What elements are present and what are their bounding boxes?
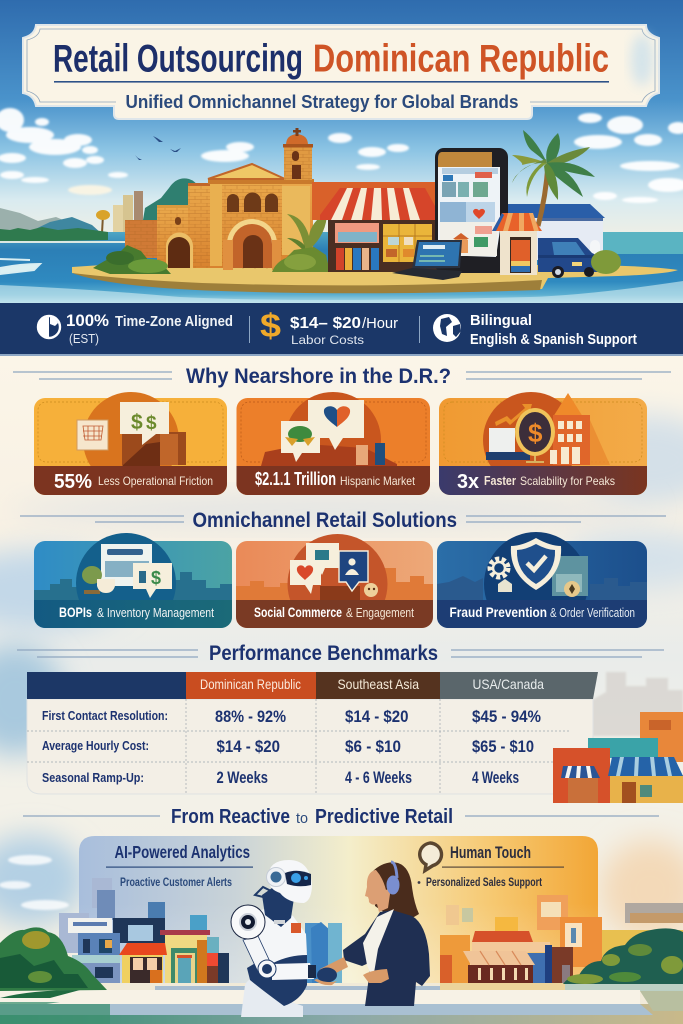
main heading: Dominican Republic xyxy=(313,38,609,80)
table header xyxy=(27,672,598,699)
side door xyxy=(166,233,193,268)
stat: bilingual: Bilingual xyxy=(470,312,532,329)
benchmarks table xyxy=(27,672,598,794)
stat: time zone xyxy=(38,312,233,346)
panel: social commerce: Social Commerce xyxy=(254,604,342,620)
tree left xyxy=(0,927,107,998)
stat: bilingual xyxy=(433,312,637,348)
small palm xyxy=(102,215,103,233)
shops illustration xyxy=(553,712,683,803)
right bush and plant xyxy=(272,212,330,272)
icon: cart and money: $ xyxy=(146,413,157,434)
stat: bilingual: English & Spanish Support xyxy=(470,331,637,348)
main heading: Retail Outsourcing xyxy=(53,38,303,80)
icon: shield and gear xyxy=(484,532,588,600)
palm tree xyxy=(512,130,595,226)
stat: time zone: Time-Zone Aligned xyxy=(115,313,233,330)
subtitle: Unified Omnichannel Strategy for Global Brands xyxy=(126,91,518,112)
panel: social commerce xyxy=(236,534,433,634)
face xyxy=(365,870,390,912)
end blocks xyxy=(207,953,218,983)
panel: 55% less friction xyxy=(34,392,227,495)
city right xyxy=(440,895,602,983)
panel: AI and human touch: Proactive Customer Alerts xyxy=(120,875,232,889)
skyline behind shops xyxy=(592,672,683,736)
tower xyxy=(284,147,312,180)
main block xyxy=(210,180,313,268)
row: first contact resolution: 88% - 92% xyxy=(215,707,286,726)
blazer xyxy=(343,910,430,1006)
panel background xyxy=(79,836,598,985)
abdomen xyxy=(247,952,307,1006)
icon: growth and coin xyxy=(483,392,610,466)
panel: AI and human touch xyxy=(59,836,602,985)
stat: time zone: (EST) xyxy=(69,331,99,346)
panel: 55% less friction: 55% xyxy=(54,471,92,493)
icon: growth and coin: $ xyxy=(528,418,543,448)
human heading: Human Touch xyxy=(450,843,531,862)
stat band xyxy=(0,303,683,356)
panel: BOPIS inventory: & Inventory Management xyxy=(97,605,214,620)
distant towers xyxy=(113,191,143,245)
panel: fraud prevention: Fraud Prevention xyxy=(450,604,547,620)
elbow xyxy=(258,960,276,978)
table header: Southeast Asia xyxy=(338,676,419,692)
row: average hourly cost: Average Hourly Cost: xyxy=(42,738,149,753)
human heading xyxy=(418,843,564,889)
row: seasonal ramp-up xyxy=(42,768,519,787)
heading: performance benchmarks: Performance Benchmarks xyxy=(209,642,438,665)
tree right xyxy=(563,928,683,984)
row: average hourly cost: $6 - $10 xyxy=(345,737,401,756)
neck xyxy=(262,888,294,927)
panel: BOPIS inventory xyxy=(34,533,232,633)
laptop xyxy=(392,240,462,280)
panel: hispanic market xyxy=(236,392,430,495)
forearm xyxy=(320,957,348,977)
panel: hispanic market: $2.1.1 Trillion xyxy=(255,469,336,489)
row: seasonal ramp-up: 2 Weeks xyxy=(216,768,268,787)
businesswoman figure xyxy=(320,862,430,1006)
heading: reactive to predictive: to xyxy=(296,810,308,827)
heading: why nearshore xyxy=(13,365,671,388)
icon: speech bubbles xyxy=(261,392,397,466)
foliage behind xyxy=(143,178,201,221)
panel: 55% less friction: Less Operational Friction xyxy=(98,474,213,488)
building right xyxy=(508,204,605,260)
heading: performance benchmarks xyxy=(17,642,664,665)
stat: labor costs xyxy=(260,307,398,347)
blue towers behind centre xyxy=(305,923,319,983)
stat: labor costs: /Hour xyxy=(362,315,398,332)
hips xyxy=(241,977,303,1017)
icon: social bubbles xyxy=(288,534,388,600)
hand xyxy=(363,969,389,983)
heading: reactive to predictive xyxy=(23,805,659,828)
row: average hourly cost xyxy=(42,737,534,756)
stat: time zone: 100% xyxy=(66,312,109,330)
church xyxy=(125,128,314,270)
heading: reactive to predictive: From Reactive xyxy=(171,805,290,828)
shirt xyxy=(363,909,394,979)
ear xyxy=(266,868,286,886)
icon: browser and money: $ xyxy=(151,568,161,588)
label band xyxy=(34,466,227,495)
torso xyxy=(255,909,307,963)
title panel xyxy=(23,25,659,119)
left annex xyxy=(125,220,159,258)
delivery van xyxy=(538,238,598,278)
ground and trees xyxy=(0,927,683,1024)
robot figure xyxy=(231,860,337,1017)
panel: fraud prevention xyxy=(437,532,647,636)
row: seasonal ramp-up: Seasonal Ramp-Up: xyxy=(42,770,144,785)
small kiosk xyxy=(492,213,542,275)
arched windows xyxy=(227,192,278,212)
icon: browser and money xyxy=(76,533,176,600)
stat: labor costs: $14– $20 xyxy=(290,315,361,332)
heading: omnichannel solutions xyxy=(20,509,666,532)
yellow shop xyxy=(165,933,207,983)
row: first contact resolution: $45 - 94% xyxy=(472,707,541,726)
row: first contact resolution xyxy=(42,707,541,726)
icon: globe xyxy=(433,314,461,342)
distant skyline right xyxy=(598,903,683,967)
island xyxy=(72,265,678,290)
headphones xyxy=(391,862,397,878)
row: seasonal ramp-up: 4 Weeks xyxy=(472,768,519,787)
stat: labor costs: Labor Costs xyxy=(291,335,364,347)
icon: cart and money xyxy=(76,392,186,466)
panel: hispanic market: Hispanic Market xyxy=(340,474,416,488)
head xyxy=(268,860,312,903)
hair xyxy=(372,862,419,920)
row: first contact resolution: First Contact Resolution: xyxy=(42,708,168,723)
shoulder xyxy=(231,905,265,939)
panel: faster scalability xyxy=(439,392,647,495)
forearm xyxy=(272,963,314,980)
red-roof shop xyxy=(122,955,163,983)
handshake xyxy=(317,968,337,982)
smartphone xyxy=(435,148,508,273)
left wall xyxy=(157,207,210,268)
panel: fraud prevention: & Order Verification xyxy=(550,605,635,620)
icon: dollar sign: $ xyxy=(260,307,281,344)
title plaque xyxy=(23,25,659,119)
panel: faster scalability: Faster xyxy=(484,474,516,488)
row: average hourly cost: $14 - $20 xyxy=(216,737,280,756)
main heading xyxy=(53,38,609,80)
heading: omnichannel solutions: Omnichannel Retail Solutions xyxy=(192,509,457,532)
pavement xyxy=(0,983,683,1024)
visor xyxy=(285,871,311,886)
left bush xyxy=(93,245,171,274)
table header: USA/Canada xyxy=(472,676,544,692)
panel: social commerce: & Engagement xyxy=(346,605,414,620)
sea xyxy=(0,232,683,303)
human heading: Personalized Sales Support xyxy=(426,875,542,889)
panel: faster scalability: 3x xyxy=(457,471,479,493)
AI heading: AI-Powered Analytics xyxy=(114,842,250,862)
row: seasonal ramp-up: 4 - 6 Weeks xyxy=(345,768,412,787)
main door xyxy=(227,219,277,268)
icon: speech bubble xyxy=(420,843,442,870)
table header: Dominican Republic xyxy=(200,676,301,692)
storefront xyxy=(312,182,440,272)
panel: faster scalability: Scalability for Peaks xyxy=(520,474,615,488)
clouds xyxy=(0,108,683,203)
panel: BOPIS inventory: BOPIs xyxy=(59,604,92,620)
heading: reactive to predictive: Predictive Retail xyxy=(315,805,453,828)
sky xyxy=(0,0,683,250)
birds xyxy=(135,136,181,160)
icon: clock xyxy=(38,316,60,338)
city left xyxy=(59,878,342,983)
row: first contact resolution: $14 - $20 xyxy=(345,707,408,726)
row: average hourly cost: $65 - $10 xyxy=(472,737,534,756)
heading: why nearshore: Why Nearshore in the D.R.? xyxy=(186,365,451,388)
page background xyxy=(0,356,683,1024)
distant hills xyxy=(0,208,110,236)
upper arm xyxy=(243,936,272,972)
hero illustration xyxy=(0,0,683,303)
table body xyxy=(27,699,593,794)
icon: cart and money: $ xyxy=(131,411,143,434)
